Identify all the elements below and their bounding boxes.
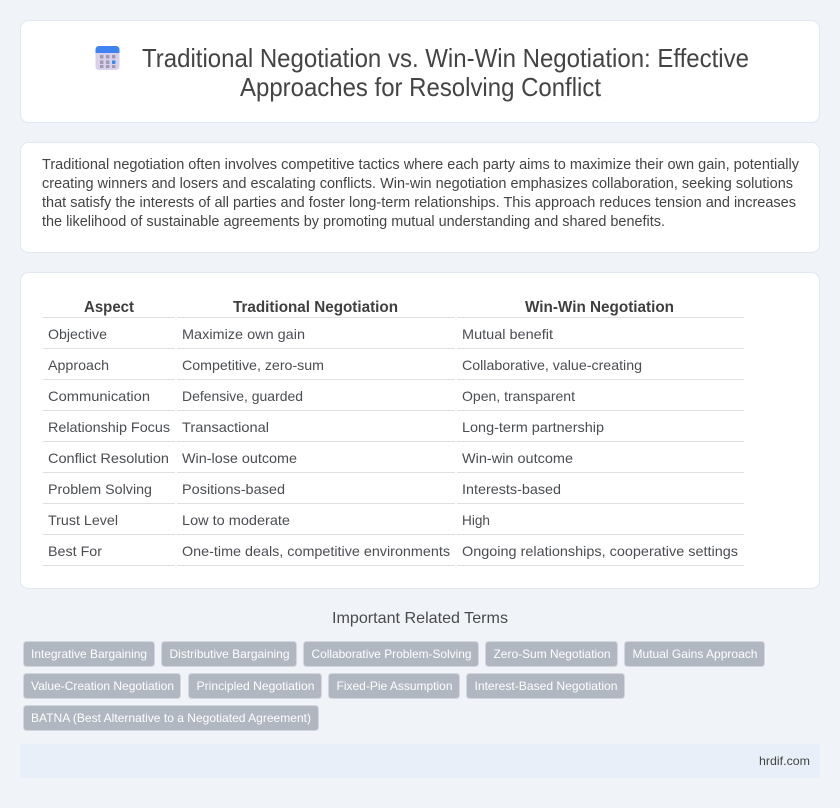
tag bbox=[24, 674, 180, 698]
tag: Collaborative Problem-Solving bbox=[312, 647, 472, 661]
row: problem solving: Positions-based bbox=[182, 481, 285, 497]
row: communication: Defensive, guarded bbox=[182, 388, 303, 404]
row: objective: Maximize own gain bbox=[182, 326, 305, 342]
row: problem solving: Interests-based bbox=[462, 481, 561, 497]
row: best for: One-time deals, competitive environments bbox=[182, 543, 450, 559]
tag bbox=[24, 642, 154, 666]
table header row: Traditional Negotiation bbox=[233, 299, 398, 316]
tag: Zero-Sum Negotiation bbox=[494, 647, 610, 661]
tag bbox=[188, 674, 322, 698]
tag: BATNA (Best Alternative to a Negotiated Agreement) bbox=[31, 711, 311, 725]
tag: Distributive Bargaining bbox=[170, 647, 290, 661]
panel: introduction text: that satisfy the interests of all parties and foster long-term relationships. This approach reduces tension and increases bbox=[42, 195, 796, 211]
tag bbox=[486, 642, 618, 666]
tag: Mutual Gains Approach bbox=[632, 647, 758, 661]
tag bbox=[328, 674, 460, 698]
table header row: Aspect bbox=[84, 299, 135, 316]
row: relationship focus: Relationship Focus bbox=[48, 419, 170, 435]
row: conflict resolution: Win-win outcome bbox=[462, 450, 573, 466]
tag: Fixed-Pie Assumption bbox=[336, 679, 452, 693]
related terms tags bbox=[24, 642, 764, 730]
tag bbox=[162, 642, 296, 666]
row: conflict resolution: Conflict Resolution bbox=[48, 450, 169, 466]
row: conflict resolution: Win-lose outcome bbox=[182, 450, 297, 466]
icon: calendar bbox=[96, 46, 120, 70]
row: communication bbox=[48, 388, 575, 404]
title: Approaches for Resolving Conflict bbox=[240, 74, 601, 102]
row: conflict resolution bbox=[48, 450, 573, 466]
row: objective: Objective bbox=[48, 326, 107, 342]
panel: introduction text: creating winners and losers and escalating conflicts. Win-win negotiation emphasizes collaboration, seeking solutions bbox=[42, 176, 793, 192]
title: Traditional Negotiation vs. Win-Win Negotiation: Effective bbox=[142, 45, 749, 73]
tag bbox=[624, 642, 764, 666]
footer: hrdif.com bbox=[759, 754, 810, 768]
row: objective bbox=[48, 326, 553, 342]
row: trust level bbox=[48, 512, 490, 528]
tag bbox=[466, 674, 624, 698]
table header row: Win-Win Negotiation bbox=[525, 299, 674, 316]
table header row bbox=[84, 299, 674, 316]
row: approach: Approach bbox=[48, 357, 109, 373]
tag: Principled Negotiation bbox=[196, 679, 314, 693]
row: trust level: Low to moderate bbox=[182, 512, 290, 528]
row: best for: Ongoing relationships, cooperative settings bbox=[462, 543, 738, 559]
row: relationship focus bbox=[48, 419, 604, 435]
header panel bbox=[20, 20, 820, 122]
row: problem solving: Problem Solving bbox=[48, 481, 152, 497]
row: relationship focus: Transactional bbox=[182, 419, 269, 435]
row: relationship focus: Long-term partnership bbox=[462, 419, 604, 435]
row: approach: Collaborative, value-creating bbox=[462, 357, 642, 373]
tag: Interest-Based Negotiation bbox=[474, 679, 618, 693]
row: trust level: High bbox=[462, 512, 490, 528]
panel: introduction text: the likelihood of sustainable agreements by promoting mutual understanding and shared benefits. bbox=[42, 214, 665, 230]
heading: important related terms: Important Related Terms bbox=[332, 610, 508, 627]
title bbox=[142, 45, 749, 102]
row: communication: Open, transparent bbox=[462, 388, 575, 404]
row: best for: Best For bbox=[48, 543, 102, 559]
panel: introduction text: Traditional negotiation often involves competitive tactics where each party aims to maximize their own gain, potentially bbox=[42, 157, 800, 173]
tag: Value-Creation Negotiation bbox=[31, 679, 174, 693]
row: problem solving bbox=[48, 481, 561, 497]
panel: comparison table bbox=[20, 272, 820, 588]
tag bbox=[24, 706, 318, 730]
tag bbox=[304, 642, 478, 666]
footer bbox=[20, 744, 820, 778]
row: communication: Communication bbox=[48, 388, 150, 404]
tag: Integrative Bargaining bbox=[31, 647, 147, 661]
row: best for bbox=[48, 543, 738, 559]
row: approach: Competitive, zero-sum bbox=[182, 357, 324, 373]
panel: introduction text bbox=[20, 142, 820, 252]
row: trust level: Trust Level bbox=[48, 512, 118, 528]
row: approach bbox=[48, 357, 642, 373]
row: objective: Mutual benefit bbox=[462, 326, 553, 342]
